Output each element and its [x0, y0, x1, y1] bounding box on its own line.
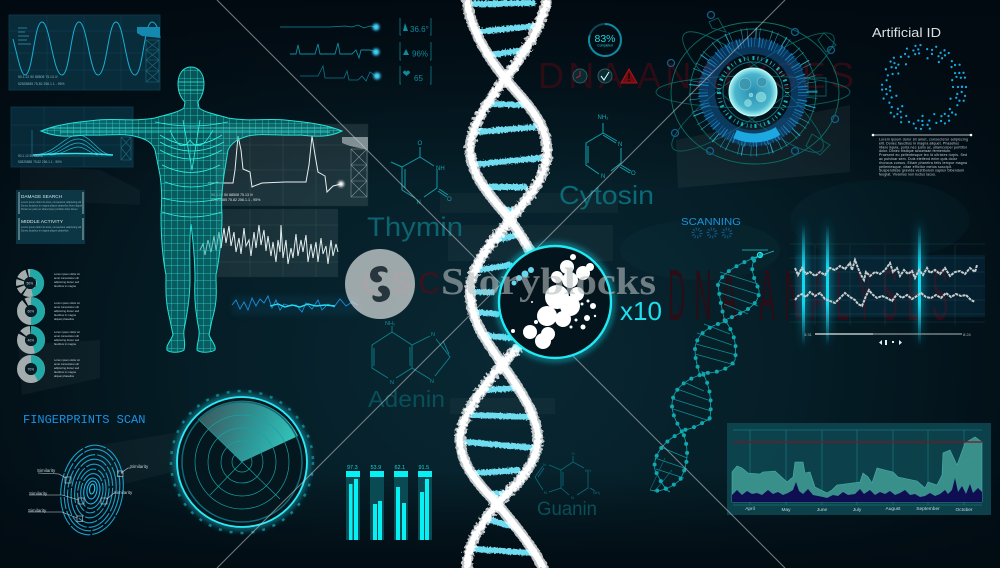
fingerprint: Similarity [29, 491, 48, 496]
blue waveform [232, 296, 358, 315]
orbit ellipses [656, 17, 850, 167]
donut captions: Lorem ipsum dolor sit [54, 358, 80, 362]
donut captions: adipiscing donec sed [54, 280, 80, 284]
heartbeat line [208, 136, 341, 192]
label: Guanin [537, 499, 597, 520]
warning icon [621, 69, 637, 83]
panel: bell curve monitor: 52825885 75.82 256.1.1 - 95% [18, 160, 62, 164]
magnified white blobs [511, 254, 596, 349]
molecule: adenin: N [390, 380, 394, 386]
donut captions: aliquet phasellus [54, 374, 75, 378]
trace 2 [290, 43, 376, 58]
panel: sine wave monitor: 52825885 75.82 256.1.1 - 95% [18, 82, 65, 86]
temperature: 36.6° [410, 25, 429, 34]
month labels: September [916, 506, 940, 512]
info text: middle activity [21, 226, 81, 232]
completion gauge 83% [589, 24, 621, 56]
tab shape [137, 27, 160, 38]
crossed strip [351, 149, 367, 197]
panel: noise waveform [200, 209, 338, 277]
hud target sphere [656, 12, 850, 167]
trace 1 [280, 25, 376, 28]
donut captions: faucibus in magna [54, 284, 76, 288]
donut captions: adipiscing donec sed [54, 338, 80, 342]
status icons [573, 69, 637, 83]
clock icon [573, 69, 587, 83]
molecule: guanin [535, 451, 601, 520]
fingerprint: Similarity [37, 468, 56, 473]
molecule: guanin: N [543, 462, 546, 467]
watermark logo and wordmark [345, 249, 656, 319]
molecule: adenin [368, 321, 450, 412]
heartbeat end point [338, 181, 344, 187]
watermark diagonal lines [217, 0, 785, 568]
paragraph: pellentesque, vitae efficitur metus suscipit. [879, 165, 952, 169]
threshold line [733, 441, 982, 443]
panel: bell curve monitor [11, 107, 133, 167]
fingerprint: Similarity [114, 490, 133, 495]
eeg lower trace [795, 290, 975, 306]
label: Thymin [367, 212, 463, 242]
molecule: thymin: NH [436, 166, 445, 172]
month labels: April [745, 506, 755, 512]
paragraph: dolor. Donec tristique accumsan fermentum. [879, 149, 951, 153]
month labels: July [853, 507, 862, 513]
oxygen: 96% [412, 50, 428, 58]
molecule: thymin: N [416, 200, 421, 206]
molecule: guanin: NH [585, 468, 591, 473]
donut captions: faucibus in magna [54, 370, 76, 374]
navy area series [732, 478, 982, 502]
bar group 62.1: 62.1 [394, 465, 405, 471]
times: 3:31 [804, 332, 813, 337]
sphere cells [739, 77, 767, 106]
molecule: cytosin: O [631, 171, 636, 177]
donut charts [20, 269, 80, 381]
paragraph: elit. Donec faucibus in magna aliquet. Phasellus [879, 141, 959, 145]
spiky blue rings [694, 33, 812, 151]
radar sweep wedge [198, 401, 298, 462]
helix strands [460, 0, 547, 568]
molecule: adenin: NH₂ [385, 321, 395, 327]
vital readouts [400, 18, 431, 84]
teal area series [732, 437, 982, 502]
magnified cyan dots [512, 267, 534, 286]
donut 1: 50% [26, 282, 33, 286]
completion gauge 83%: Completed [597, 44, 613, 48]
artificial id heading: Artificial ID [872, 25, 941, 40]
month labels [745, 506, 973, 513]
panel: grey heartbeat monitor [208, 124, 368, 206]
wordmark: Storyblocks [441, 261, 656, 303]
check icon [598, 69, 612, 83]
scanning heading: SCANNING [681, 217, 741, 228]
completion gauge 83%: 83% [594, 33, 616, 45]
radar bright ring [177, 397, 307, 527]
molecule: guanin: O [572, 451, 575, 456]
main dna double helix [460, 0, 547, 568]
panel: grey heartbeat monitor: 52825885 75.82 256.1.1 - 95% [211, 198, 261, 202]
eeg waveform panel [790, 215, 985, 350]
bell curves [33, 135, 113, 155]
crossed strip [121, 137, 131, 160]
molecule: guanin: N [544, 490, 547, 495]
crossed strip [146, 40, 159, 82]
molecule: guanin: NH₂ [593, 490, 601, 495]
donut captions: Lorem ipsum dolor sit [54, 301, 80, 305]
helix strands [650, 255, 761, 491]
progress bar [815, 333, 873, 335]
faint red text: DNA analyses top: DNA ANALYSES [538, 55, 854, 96]
paragraph: ac pulvinar sem. Duis eleifend enim quis dolor [879, 157, 958, 161]
zoom label: x10 [620, 296, 662, 326]
trace 3 [300, 66, 376, 81]
panel readout: 50.1.12 50 88508 [18, 154, 43, 158]
helix tip [758, 252, 762, 258]
eeg upper trace [795, 260, 977, 280]
wireframe human figure [40, 60, 345, 355]
area chart panel [727, 423, 991, 515]
donut captions: faucibus in magna [54, 342, 76, 346]
fingerprint [28, 441, 149, 539]
bar charts [346, 465, 432, 540]
vital sign traces [280, 24, 380, 81]
donut 4: 70% [28, 368, 34, 372]
info text: middle activity: Donec faucibus in magna aliquet phasellus [21, 230, 69, 232]
heading: damage search: DAMAGE SEARCH [21, 194, 62, 199]
artificial id dot ring [882, 45, 966, 129]
pulse: 65 [414, 74, 423, 83]
molecule: thymin: O [447, 197, 452, 203]
molecule: cytosin: N [601, 174, 605, 180]
helix rungs [655, 272, 760, 478]
donut captions: amet consectetur elit [54, 305, 79, 309]
molecule: cytosin: NH₂ [598, 115, 609, 121]
print ridges [55, 441, 129, 539]
label: Adenin [368, 386, 445, 412]
panel readout: 50.1.12 50 88508 75.13 /// [18, 75, 58, 79]
fingerprint: Similarity [28, 508, 47, 513]
panel readout: 50.1.12 50 88508 75.13 /// [211, 193, 253, 197]
month labels: May [781, 507, 791, 513]
markers and similarity labels [28, 468, 131, 522]
heading: middle activity: MIDDLE ACTIVITY [21, 219, 63, 224]
bar group 53.9: 53.9 [370, 465, 381, 471]
glowing end points [372, 24, 380, 80]
bar group 97.3: 97.3 [347, 465, 358, 471]
paragraph: Suspendisse gravida vestibulum sapien bibendum [879, 169, 964, 173]
donut captions: amet consectetur elit [54, 334, 79, 338]
molecule: adenin: N [431, 332, 435, 338]
radar rings and axes [195, 415, 289, 509]
base pair rungs [467, 3, 540, 553]
donut captions: aliquet phasellus [54, 317, 75, 321]
molecule: guanin: N [571, 495, 574, 500]
node circles [668, 12, 838, 154]
label: Cytosin [559, 180, 654, 210]
info text: damage search [21, 201, 82, 211]
info box: damage search and middle activity [16, 190, 85, 244]
fingerprint: Similarity [130, 464, 149, 469]
donut 2: 60% [28, 310, 34, 314]
bar group 91.5: 91.5 [418, 465, 429, 471]
panel: sine wave monitor [9, 15, 160, 90]
faint red text: DNA analyses right: DNA ANALYSES [668, 256, 948, 336]
donut 3: 40% [28, 338, 34, 342]
ring [499, 246, 611, 358]
small dna helix [650, 250, 774, 492]
molecule: thymin: O [418, 141, 422, 147]
eeg waveform panel: 8:24 [963, 332, 972, 337]
donut captions: Lorem ipsum dolor sit [54, 272, 80, 276]
paragraph: feugiat. Vivamus non luctus lacus. [879, 173, 936, 177]
paragraph: rhoncus cursus. Etiam pharetra felis tempor magna [879, 161, 967, 165]
info text: damage search: Lorem ipsum dolor sit amet, consectetur adipiscing elit [21, 201, 81, 204]
paragraph: Praesent eu pellentesque leo id ultricies turpis. Sed [879, 153, 967, 157]
corner tab [342, 137, 368, 150]
donut captions: amet consectetur elit [54, 362, 79, 366]
info text: damage search: Porta nec justo ac ullamcorper porttitor dolor donec [21, 208, 78, 211]
donut captions [54, 272, 80, 378]
info text: damage search: Donec faucibus in magna aliquet phasellus libero ligula [21, 204, 82, 208]
month labels: June [817, 507, 828, 513]
month labels: October [955, 507, 973, 513]
fingerprints scan heading: FINGERPRINTS SCAN [23, 413, 145, 427]
donut captions: Lorem ipsum dolor sit [54, 330, 80, 334]
molecule: thymin [367, 141, 463, 242]
donut captions: amet consectetur elit [54, 276, 79, 280]
logo circle [345, 249, 415, 319]
info text: middle activity: Lorem ipsum dolor sit amet, consectetur adipiscing elit [21, 226, 81, 229]
faint red text: left fragment: CSC [362, 267, 440, 300]
month labels: August [886, 506, 901, 512]
radar [171, 391, 313, 533]
vertical scan beams [800, 215, 923, 350]
molecule: adenin: N [430, 379, 434, 385]
magnifier circle x10 [498, 245, 662, 359]
paragraph: libero ligula, porta nec justo ac, ullamcorper porttitor [879, 145, 968, 149]
molecule: cytosin [559, 115, 654, 210]
paragraph: Lorem ipsum dolor sit amet, consectetur adipiscing [879, 138, 968, 142]
molecule: cytosin: N [618, 142, 622, 148]
artificial id divider and text [872, 134, 972, 177]
scanning spinner icons [693, 229, 731, 237]
paragraph [879, 138, 968, 177]
central sphere [729, 68, 777, 116]
donut captions: faucibus in magna [54, 313, 76, 317]
donut captions: adipiscing donec sed [54, 366, 80, 370]
player controls [879, 340, 902, 345]
sine wave [13, 22, 160, 75]
donut captions: adipiscing donec sed [54, 309, 80, 313]
